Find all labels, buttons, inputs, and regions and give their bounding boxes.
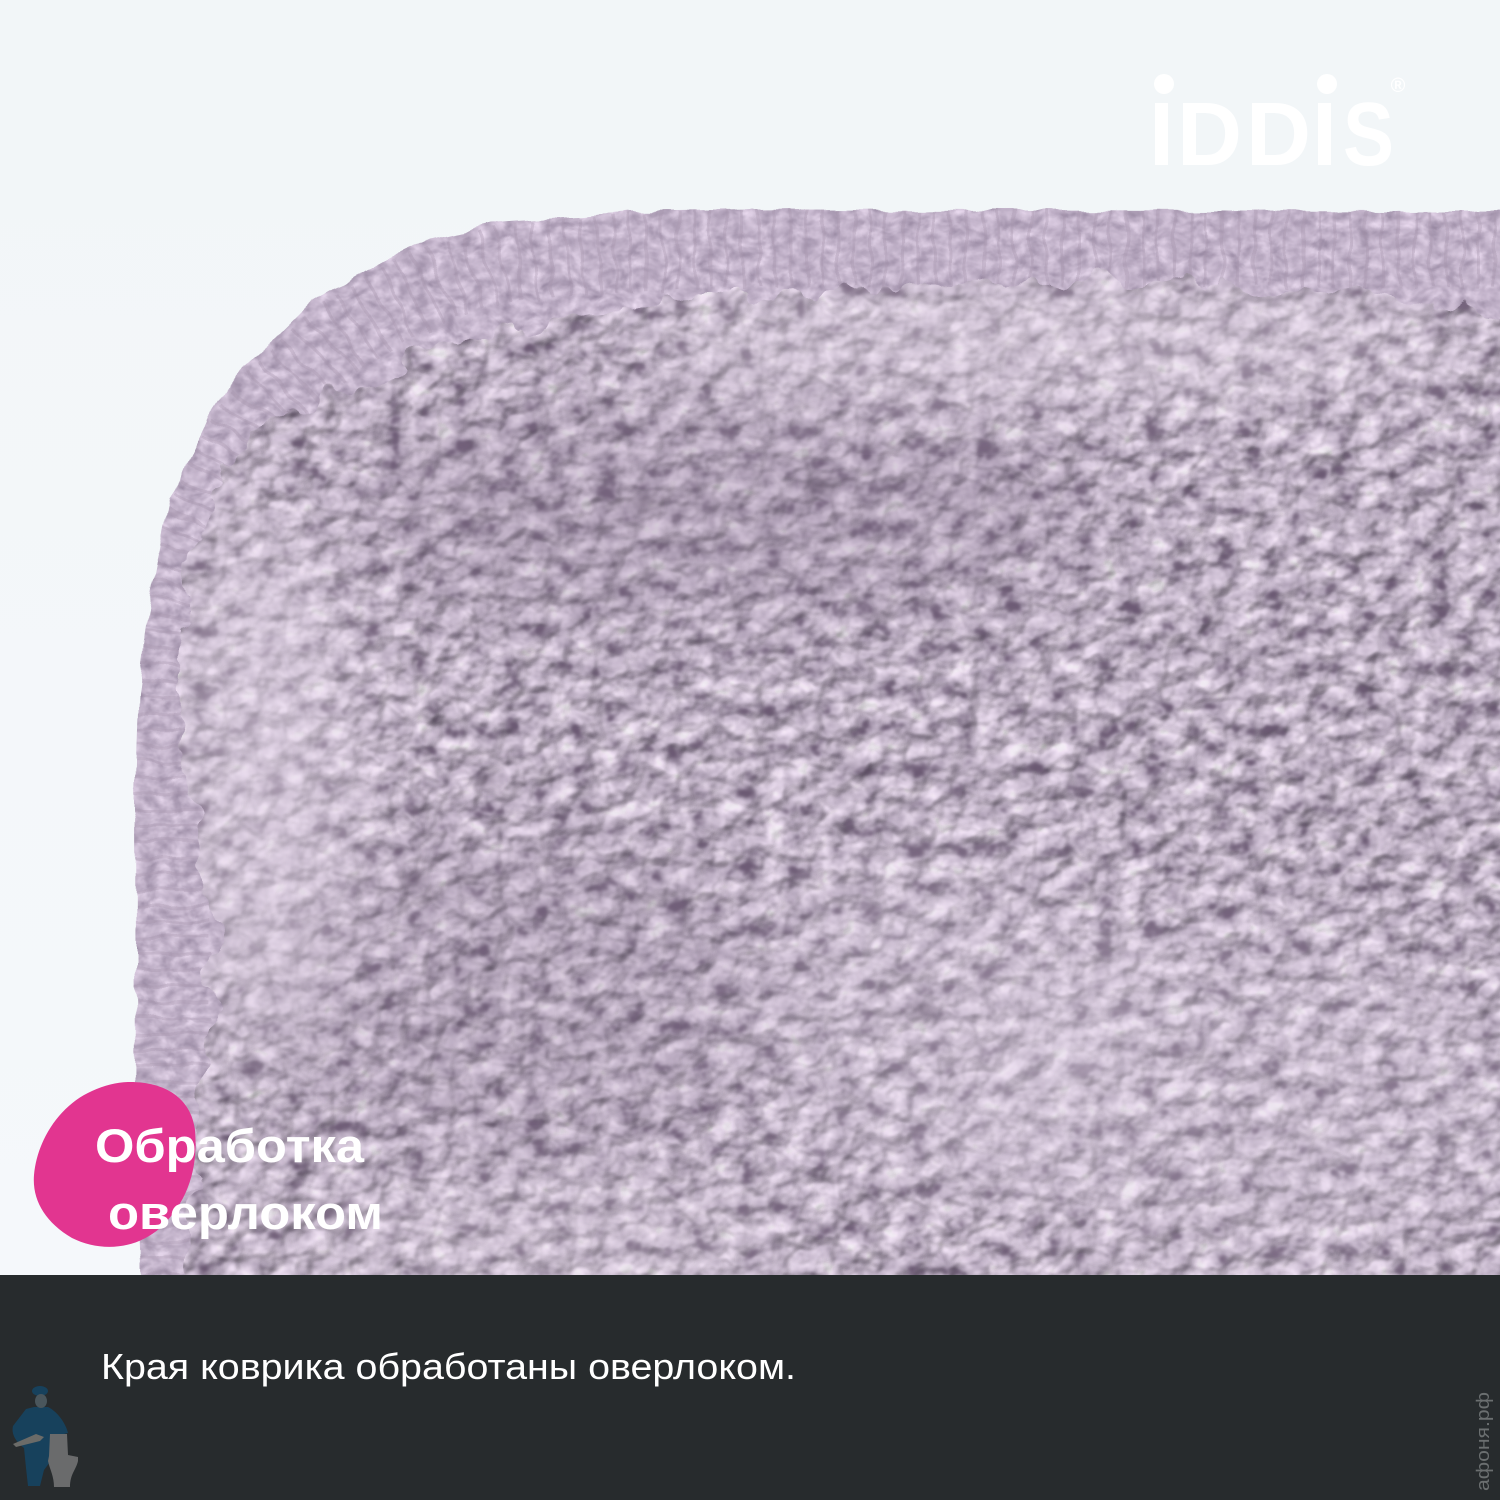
plumber head <box>35 1394 47 1408</box>
logo: IDDIS: ® <box>1391 75 1406 97</box>
logo: IDDIS: I <box>1312 85 1337 185</box>
toilet <box>48 1434 78 1487</box>
pink blob badge <box>34 1082 196 1247</box>
badge heading <box>95 1119 383 1239</box>
logo: IDDIS: S <box>1343 85 1394 185</box>
wrench <box>13 1434 44 1447</box>
icon: plumber with toilet <box>13 1386 78 1487</box>
rug overlock border <box>120 200 1500 1350</box>
rug shaggy pile <box>140 260 1500 1340</box>
dark footer band <box>0 1275 1500 1500</box>
logo: IDDIS <box>1149 74 1406 185</box>
logo: IDDIS: D <box>1246 85 1311 185</box>
plumber figure <box>13 1386 68 1486</box>
description text: Края коврика обработаны оверлоком. <box>101 1346 796 1387</box>
watermark: афоня.рф <box>1473 1392 1493 1491</box>
logo: IDDIS: D <box>1177 85 1242 185</box>
badge heading: оверлоком <box>108 1186 383 1239</box>
logo: IDDIS: I <box>1149 85 1174 185</box>
deep shadow gaps <box>400 478 939 1016</box>
bath rug photo <box>120 200 1500 1350</box>
badge heading: Обработка <box>95 1119 365 1172</box>
tonal shading <box>180 295 1500 1285</box>
